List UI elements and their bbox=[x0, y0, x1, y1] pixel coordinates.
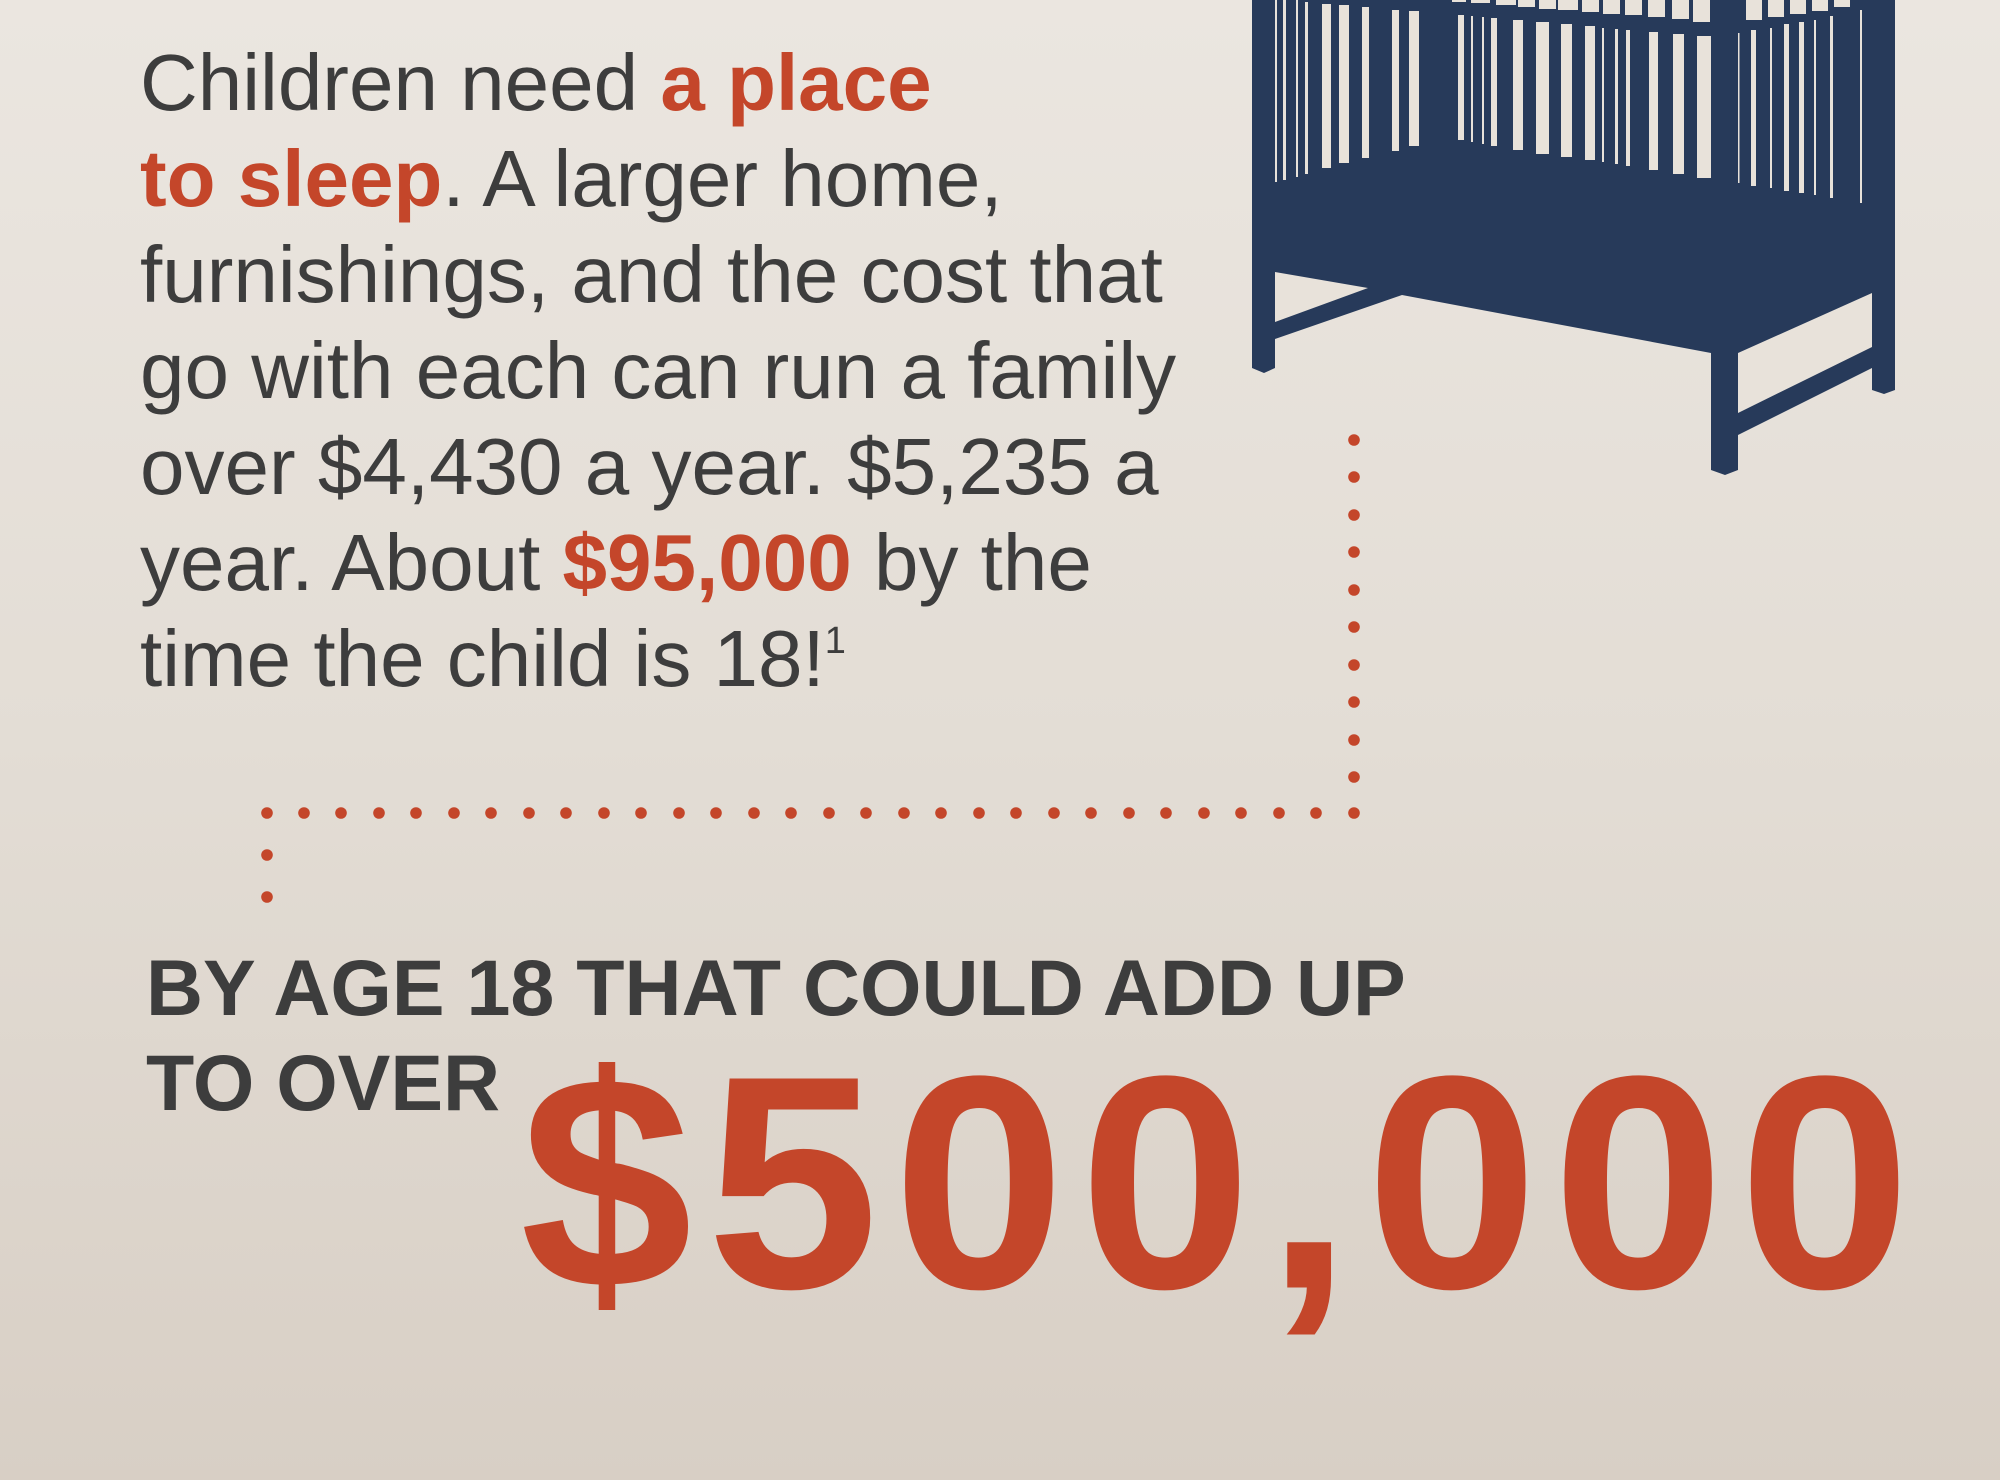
text block: sleep cost: to sleep. A larger home, bbox=[140, 134, 1003, 223]
text block: sleep cost: time the child is 18!1 bbox=[140, 614, 846, 703]
text block: sleep cost: over $4,430 a year. $5,235 a bbox=[140, 422, 1159, 511]
text block: sleep cost: Children need a place bbox=[140, 38, 932, 127]
text block: sleep cost bbox=[140, 38, 1176, 703]
headline bbox=[146, 943, 1406, 1127]
text block: sleep cost: go with each can run a family bbox=[140, 326, 1176, 415]
text block: sleep cost: furnishings, and the cost that bbox=[140, 230, 1163, 319]
headline: TO OVER bbox=[146, 1038, 500, 1127]
big number: $500,000 bbox=[520, 1012, 1925, 1352]
headline: BY AGE 18 THAT COULD ADD UP bbox=[146, 943, 1406, 1032]
text block: sleep cost: year. About $95,000 by the bbox=[140, 518, 1092, 607]
